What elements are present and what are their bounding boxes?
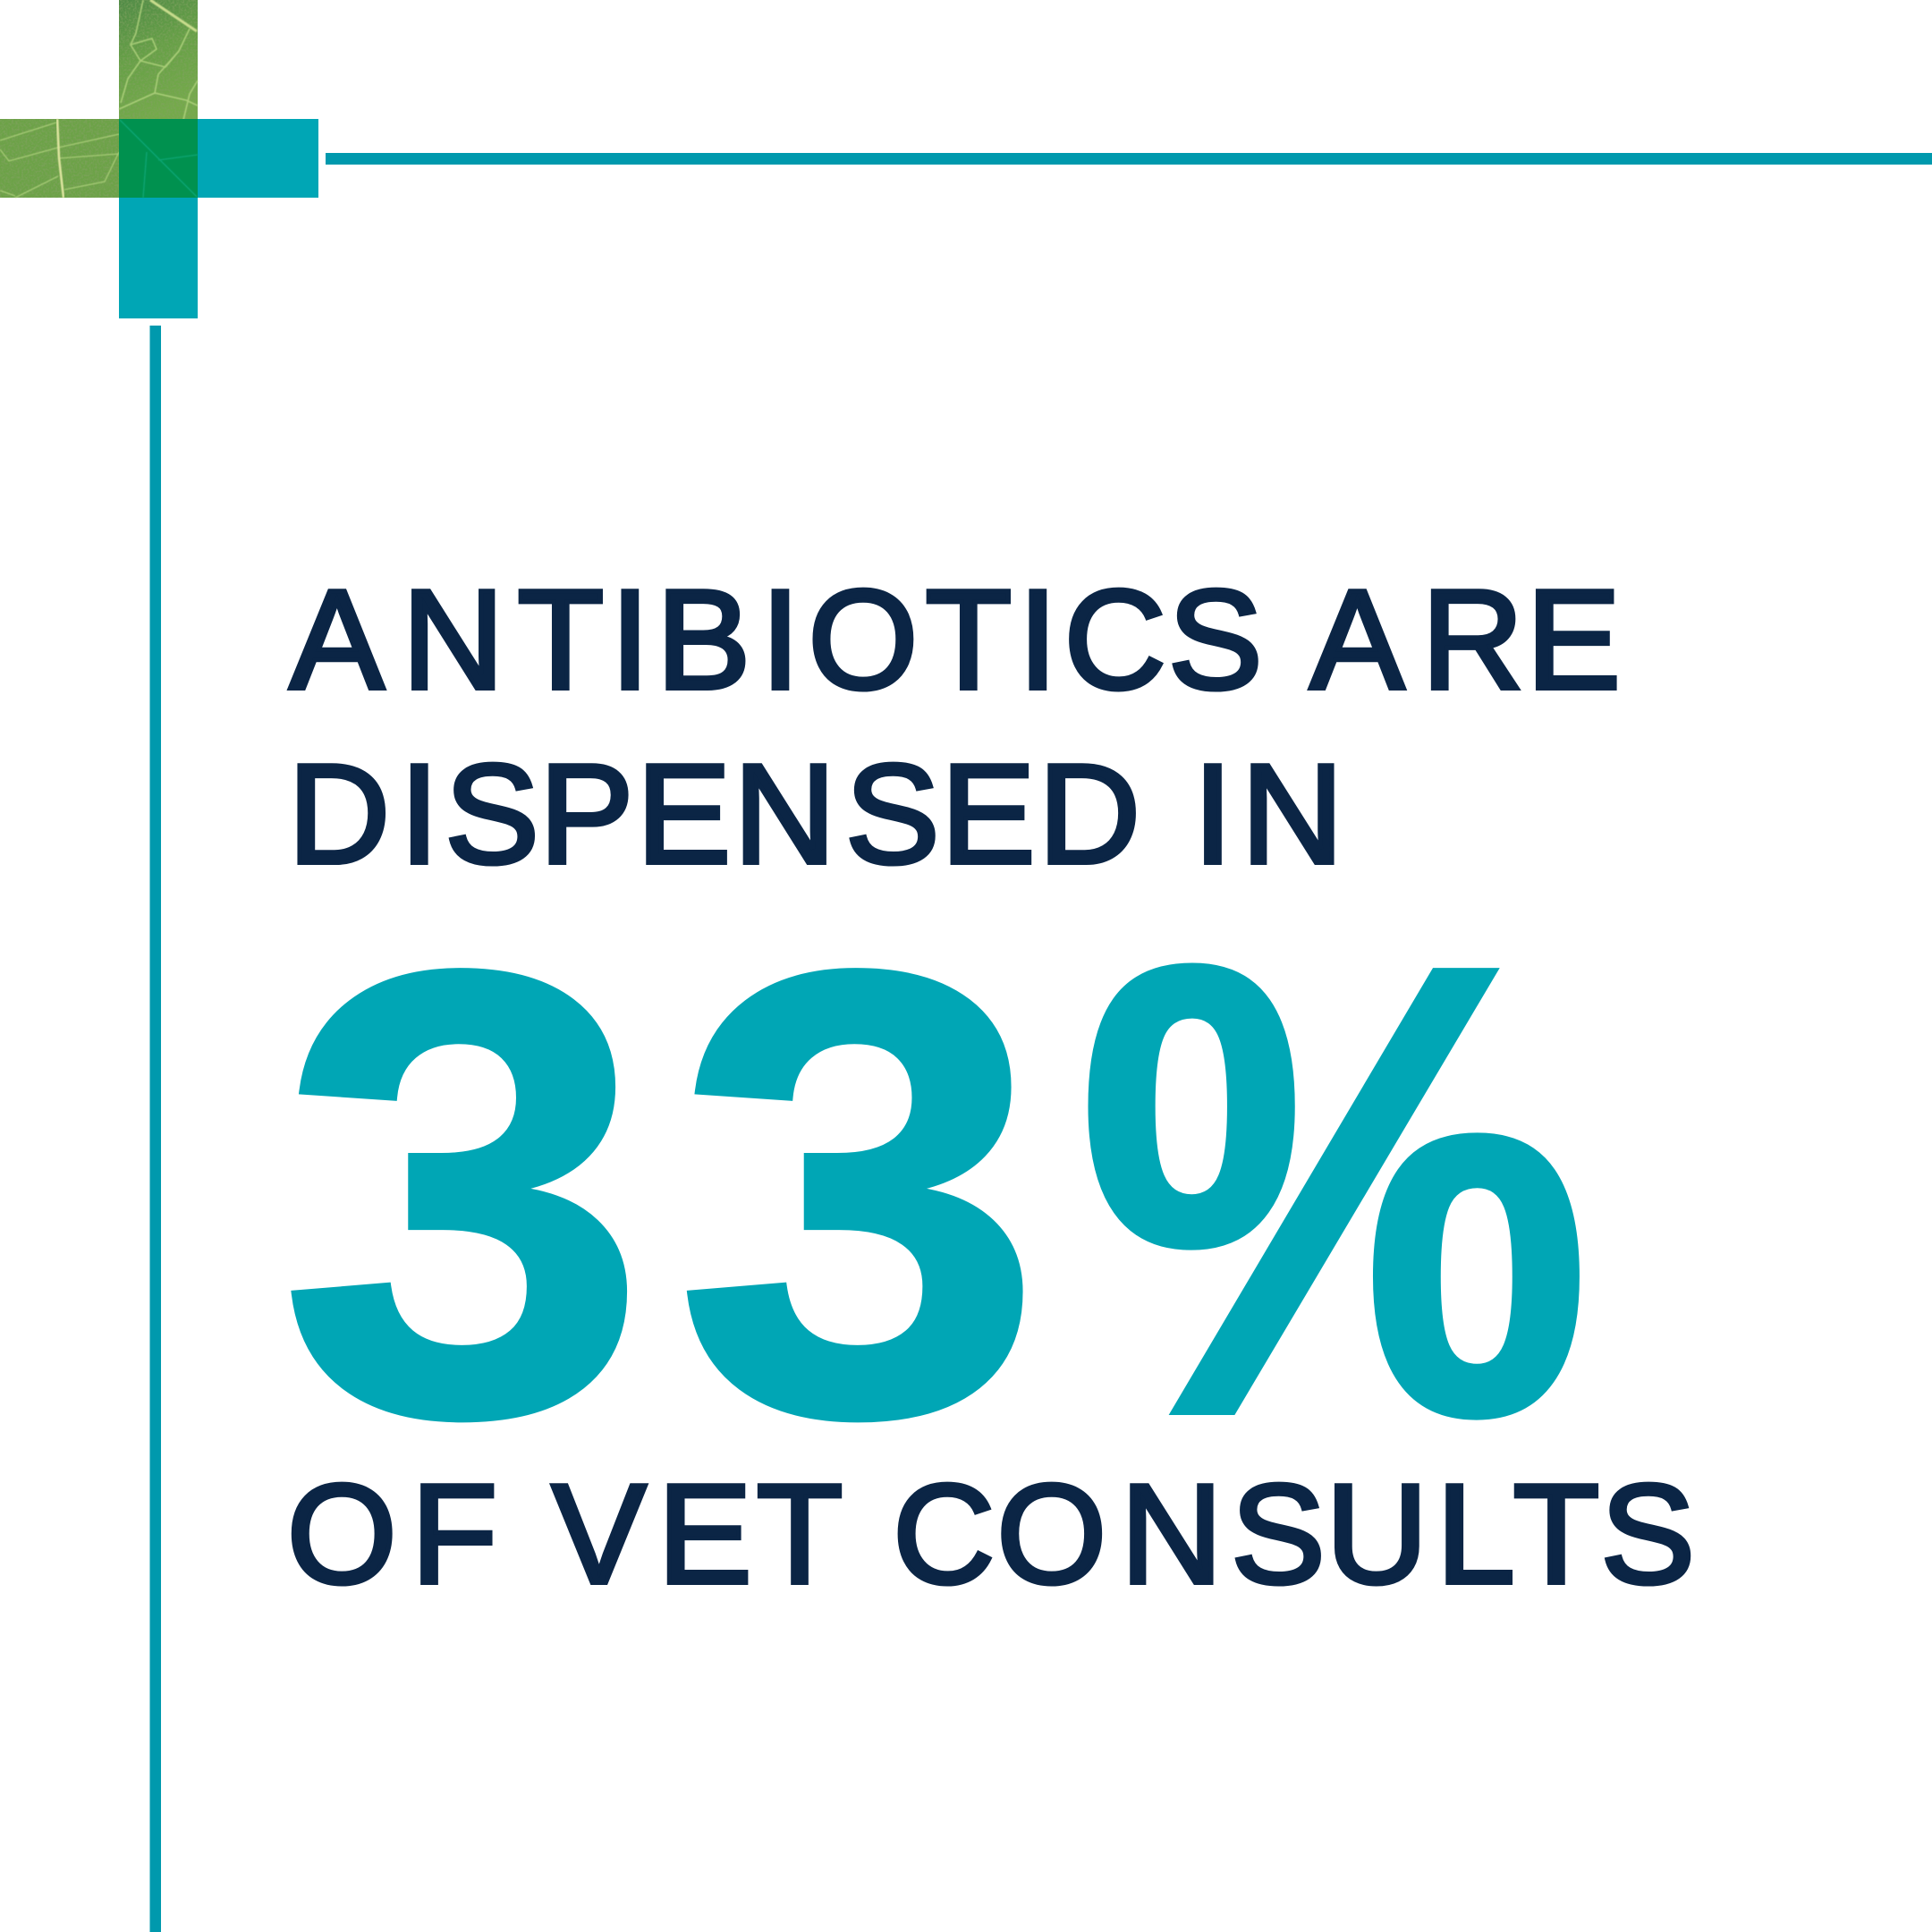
percent sign: % xyxy=(1077,834,1591,1547)
cross overlap square xyxy=(119,119,198,198)
big statistic: 33% xyxy=(280,834,1591,1547)
leaf top arm xyxy=(119,0,198,120)
heading line 3: OF VET CONSULTS xyxy=(287,1456,1695,1614)
icon: leaf and teal cross xyxy=(0,0,318,318)
digits 33: 33 xyxy=(280,842,1043,1546)
vertical rule xyxy=(150,326,161,1932)
teal cross right arm xyxy=(198,119,318,198)
horizontal rule xyxy=(326,153,1932,165)
heading line 2: DISPENSED IN xyxy=(288,735,1343,893)
teal cross bottom arm xyxy=(119,198,198,318)
heading line 1: ANTIBIOTICS ARE xyxy=(290,562,1621,719)
leaf left arm xyxy=(0,119,120,198)
